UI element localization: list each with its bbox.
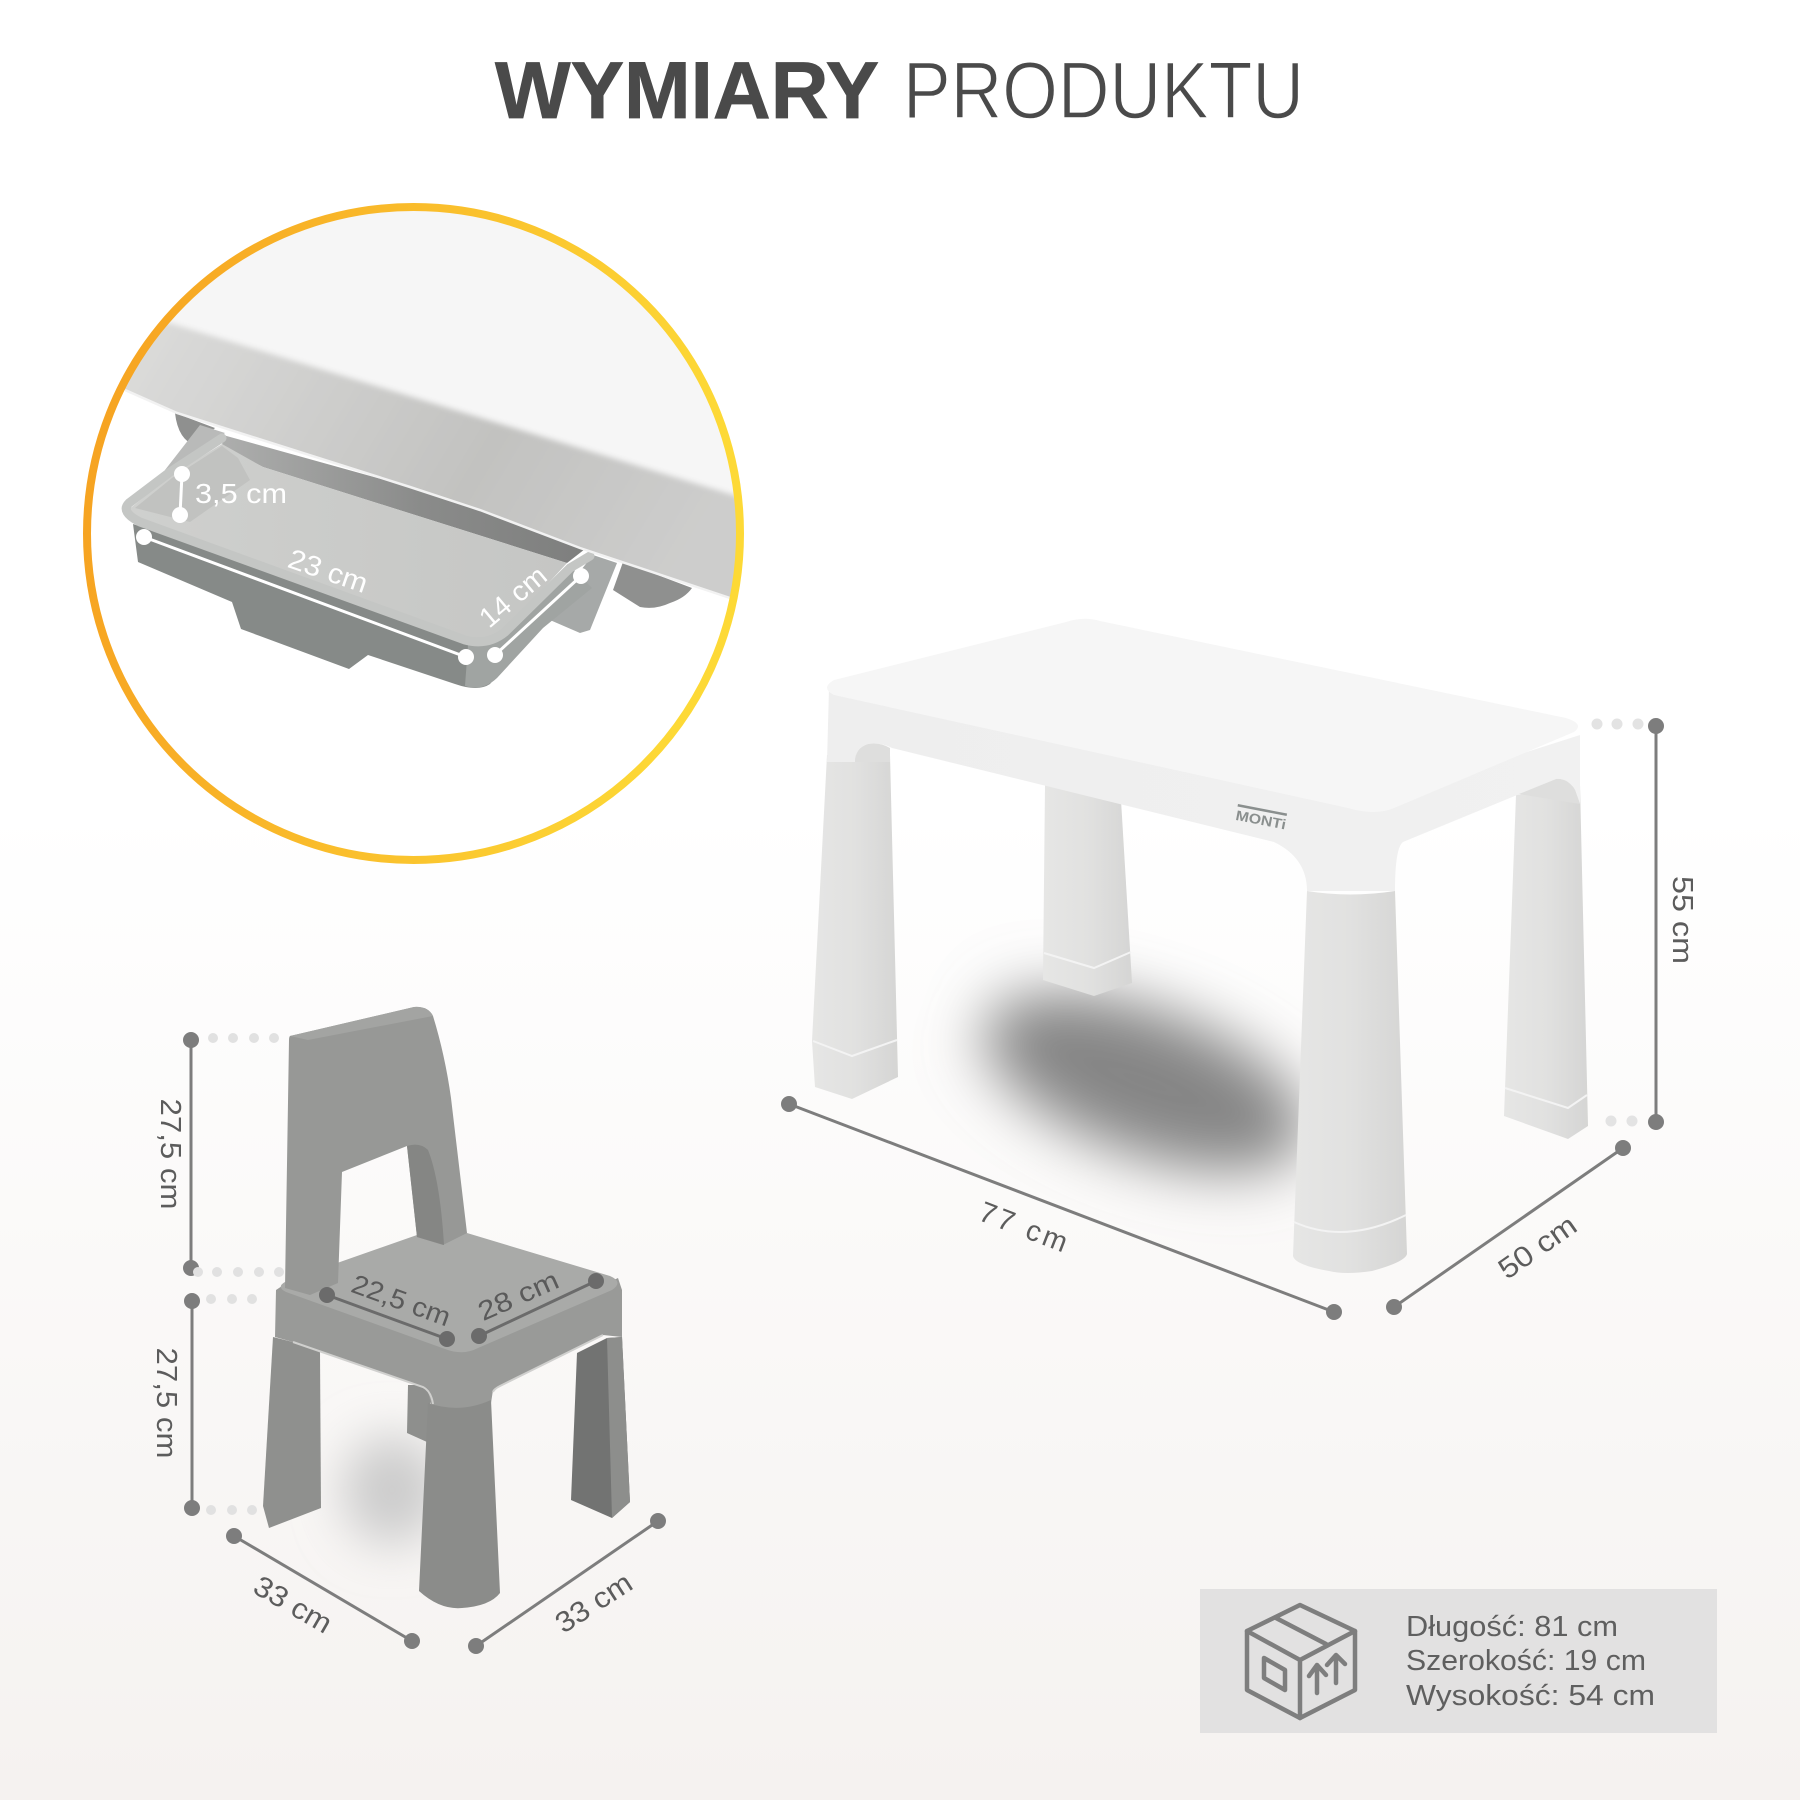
tray side wall [465,570,575,688]
package text [1406,1611,1655,1712]
dimension: 77 cm [781,1096,1342,1320]
dimension: chair 33 cm right: 33 cm [550,1567,638,1640]
tray interior [128,444,567,638]
dimension: chair 33 cm left [226,1528,420,1649]
left arch [855,744,890,762]
backrest inner side [407,1145,444,1245]
right leg outer [607,1337,630,1518]
dimension: 14 cm: 14 cm [473,560,553,634]
table top [827,619,1578,812]
seat top [281,1233,618,1352]
tray hinge right [552,556,617,633]
table lower edge highlight [125,390,730,598]
dimension: seat 28 cm: 28 cm [473,1265,563,1327]
title: WYMIARY [495,46,879,136]
tray left inner wall [135,446,250,522]
table shadow [961,956,1329,1208]
tray rim [126,438,590,642]
dimension: 50 cm [1386,1140,1631,1315]
dimension: chair 33 cm right [468,1513,666,1654]
right arch [1519,779,1580,804]
dimension: chair lower height 27,5 cm: 27,5 cm [150,1348,182,1458]
package text: Długość: 81 cm [1406,1611,1618,1643]
table edge band [124,322,736,596]
backrest [285,1007,467,1295]
left leg [263,1337,321,1528]
panel: package dimensions [1200,1589,1717,1733]
dimension: seat 28 cm [471,1265,604,1344]
dimension: 55 cm: 55 cm [1666,876,1698,964]
right leg [1504,785,1588,1139]
package text: Szerokość: 19 cm [1406,1645,1646,1677]
dimension: 50 cm: 50 cm [1493,1209,1583,1286]
title [495,46,1304,136]
dimension: 23 cm [136,529,474,665]
dimension: seat 22,5 cm: 22,5 cm [348,1269,455,1332]
icon: package box [1247,1605,1355,1718]
front leg [1293,891,1407,1273]
chair [263,1007,630,1608]
dimension: 3,5 cm: 3,5 cm [195,478,287,509]
dimension: seat 22,5 cm [319,1269,455,1347]
tray hinge left [165,425,225,470]
chair shadow [342,1435,442,1545]
dimension: 14 cm [473,560,589,663]
leg foot seams [813,952,1587,1232]
backrest top bevel [290,1007,433,1040]
left leg [812,755,898,1099]
table apron [827,688,1580,891]
white area under table [91,390,730,856]
back leg [407,1385,432,1442]
panel: drawer detail circle [80,200,770,880]
front leg [419,1400,500,1608]
package text: Wysokość: 54 cm [1406,1680,1655,1712]
dimension: 23 cm: 23 cm [284,543,372,599]
tray back wall [222,435,585,563]
title: PRODUKTU [903,46,1304,136]
dimension: 55 cm [1592,718,1698,1130]
logo: MONTi [1234,807,1287,832]
dimension: chair upper height 27,5 cm [154,1032,284,1277]
dimension: 77 cm: 77 cm [975,1196,1072,1259]
right leg [571,1337,630,1518]
dimension: chair lower height 27,5 cm [150,1293,257,1516]
dimension: chair upper height 27,5 cm: 27,5 cm [154,1098,186,1210]
back leg [1043,785,1132,996]
seat underside seam [293,1335,603,1404]
seat apron [275,1278,622,1409]
dark wheels under table [175,413,692,608]
dimension: 3,5 cm [172,466,287,523]
tray body underside [133,524,510,688]
dimension: chair 33 cm left: 33 cm [248,1570,337,1640]
table [812,619,1588,1273]
ring [87,207,740,860]
